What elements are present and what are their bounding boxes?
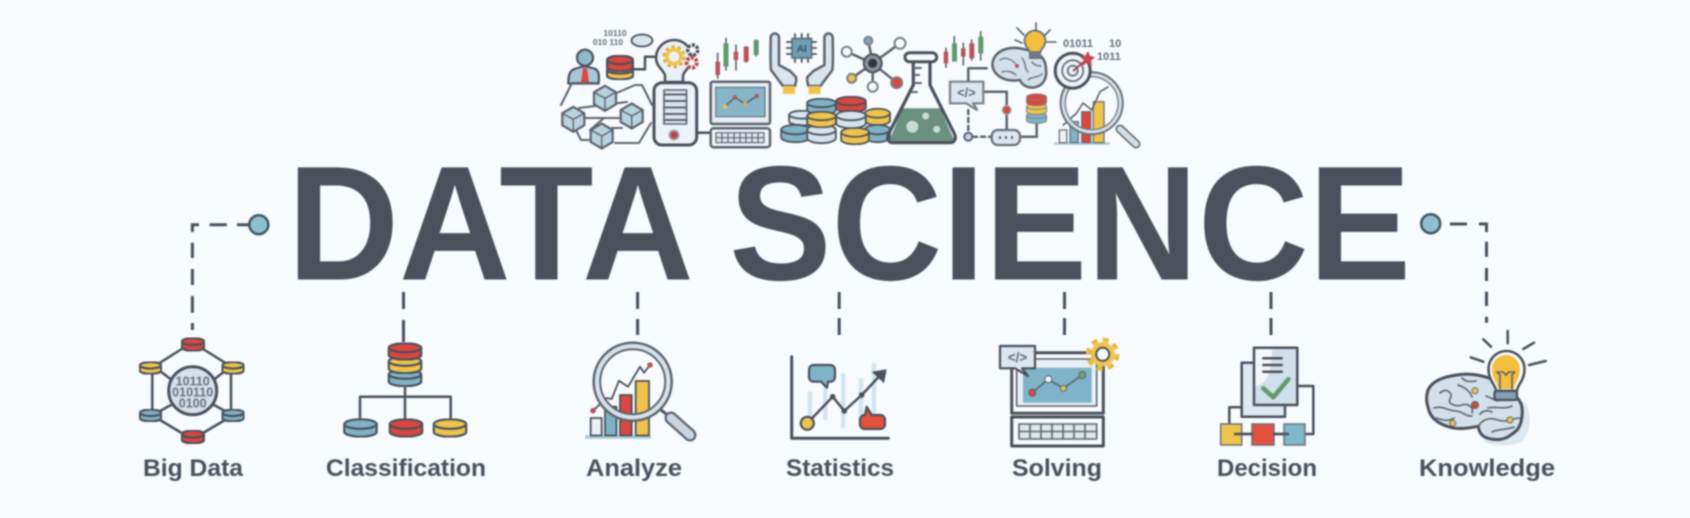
- connector stubs below the title: [404, 292, 1271, 342]
- icon: person: [568, 50, 599, 84]
- icon: brain with idea bulb: [992, 23, 1056, 88]
- icon: Solving laptop with gear and code bubble: </>: [1008, 350, 1027, 365]
- label: Big Data: Big Data: [143, 455, 243, 482]
- icon: database with binary text: 010 110: [593, 37, 623, 47]
- icon: AI chip held by hands: AI: [797, 44, 807, 55]
- icon: Big Data network: 0100: [179, 396, 207, 410]
- icon: database with binary text: [593, 28, 657, 79]
- icon: candlestick chart right: [944, 32, 983, 67]
- label: Decision: Decision: [1217, 455, 1317, 482]
- icon: Knowledge brain and bulb: [1427, 331, 1546, 445]
- label: Solving: Solving: [1012, 455, 1102, 482]
- icon: candlestick chart left: [716, 38, 759, 78]
- label: Statistics: Statistics: [786, 455, 894, 482]
- icon: blockchain hex network: [561, 83, 652, 148]
- icon: Analyze magnifier over bars: [585, 343, 690, 437]
- icon: Big Data network: [140, 338, 244, 443]
- icon: database with binary text: 10110: [603, 28, 627, 38]
- icon: node network: [842, 37, 906, 92]
- text: binary digits: 01011: [1063, 38, 1093, 50]
- text: binary digits: 10: [1109, 38, 1121, 50]
- text: binary digits: 1011: [1097, 51, 1121, 63]
- icon: code workflow: [950, 68, 1046, 145]
- icon: code workflow: </>: [957, 85, 976, 100]
- title: DATA SCIENCE: SCIENCE: [729, 132, 1411, 315]
- icon: Decision documents and flow: [1221, 348, 1313, 445]
- title: DATA SCIENCE: [288, 132, 1411, 315]
- connector: left node to Big Data: [192, 215, 268, 330]
- icon: target and magnifier over bars: [1054, 51, 1136, 144]
- top illustration cluster: [561, 23, 1136, 148]
- title: DATA SCIENCE: DATA: [288, 132, 694, 314]
- text: binary digits: [1063, 38, 1121, 63]
- label: Classification: Classification: [326, 455, 486, 482]
- icon: Statistics line chart: [792, 357, 888, 438]
- icon: coin stacks: [781, 97, 890, 144]
- connector: right node to Knowledge: [1421, 214, 1486, 323]
- icon: Big Data network: 10110: [176, 374, 210, 388]
- icon: AI chip held by hands: [770, 34, 833, 94]
- label: Knowledge: Knowledge: [1419, 455, 1555, 482]
- label: Analyze: Analyze: [586, 455, 682, 482]
- icon: Big Data network: 010110: [172, 386, 213, 400]
- icon: lab flask: [888, 53, 955, 143]
- icon: Classification tree: [344, 343, 466, 437]
- icon: monitor with line chart: [697, 82, 770, 147]
- icon: server tower with idea bulb and gears: [654, 40, 698, 145]
- icon: Solving laptop with gear and code bubble: [1000, 340, 1117, 446]
